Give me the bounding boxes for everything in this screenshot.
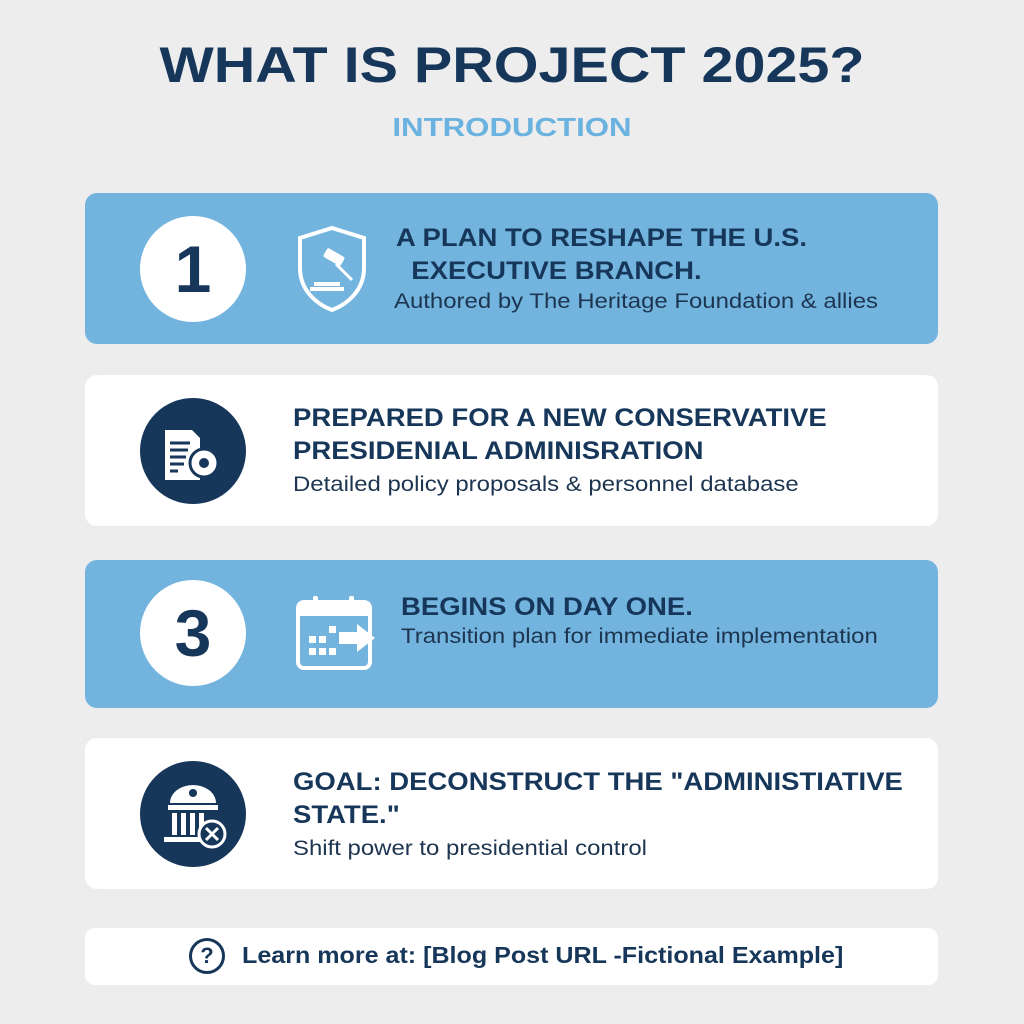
sub 3: Transition plan for immediate implementation: [401, 625, 878, 648]
heading 2: PREPARED FOR A NEW CONSERVATIVE: [293, 404, 827, 432]
heading 1: EXECUTIVE BRANCH.: [411, 257, 702, 285]
footer text: Learn more at: [Blog Post URL -Fictional Example]: [242, 942, 843, 968]
panel: card 1: [85, 193, 938, 344]
number 3: 3: [175, 596, 211, 670]
sub 4: Shift power to presidential control: [293, 837, 647, 860]
heading 4: [293, 768, 903, 829]
subtitle: INTRODUCTION: [392, 112, 632, 142]
heading 4: GOAL: DECONSTRUCT THE "ADMINISTIATIVE: [293, 768, 903, 796]
icon: question: ?: [200, 943, 214, 968]
heading 1: [396, 224, 807, 285]
panel: card 2: [85, 375, 938, 526]
icon: document gear: [140, 398, 246, 504]
title: WHAT IS PROJECT 2025?: [159, 37, 865, 93]
panel: card 4: [85, 738, 938, 889]
icon: calendar arrow: [296, 596, 375, 670]
footer: [85, 928, 938, 985]
icon: building x: [140, 761, 246, 867]
icon: question: [189, 938, 225, 974]
heading 2: [293, 404, 827, 465]
panel: card 3: [85, 560, 938, 708]
sub 1: Authored by The Heritage Foundation & allies: [394, 290, 878, 313]
icon: shield gavel: [298, 226, 366, 312]
heading 1: A PLAN TO RESHAPE THE U.S.: [396, 224, 807, 252]
heading 3: BEGINS ON DAY ONE.: [401, 593, 693, 621]
number 3: [140, 580, 246, 686]
heading 4: STATE.": [293, 801, 400, 829]
number 1: 1: [175, 232, 211, 306]
number 1: [140, 216, 246, 322]
sub 2: Detailed policy proposals & personnel database: [293, 473, 799, 496]
heading 2: PRESIDENIAL ADMINISRATION: [293, 437, 703, 465]
